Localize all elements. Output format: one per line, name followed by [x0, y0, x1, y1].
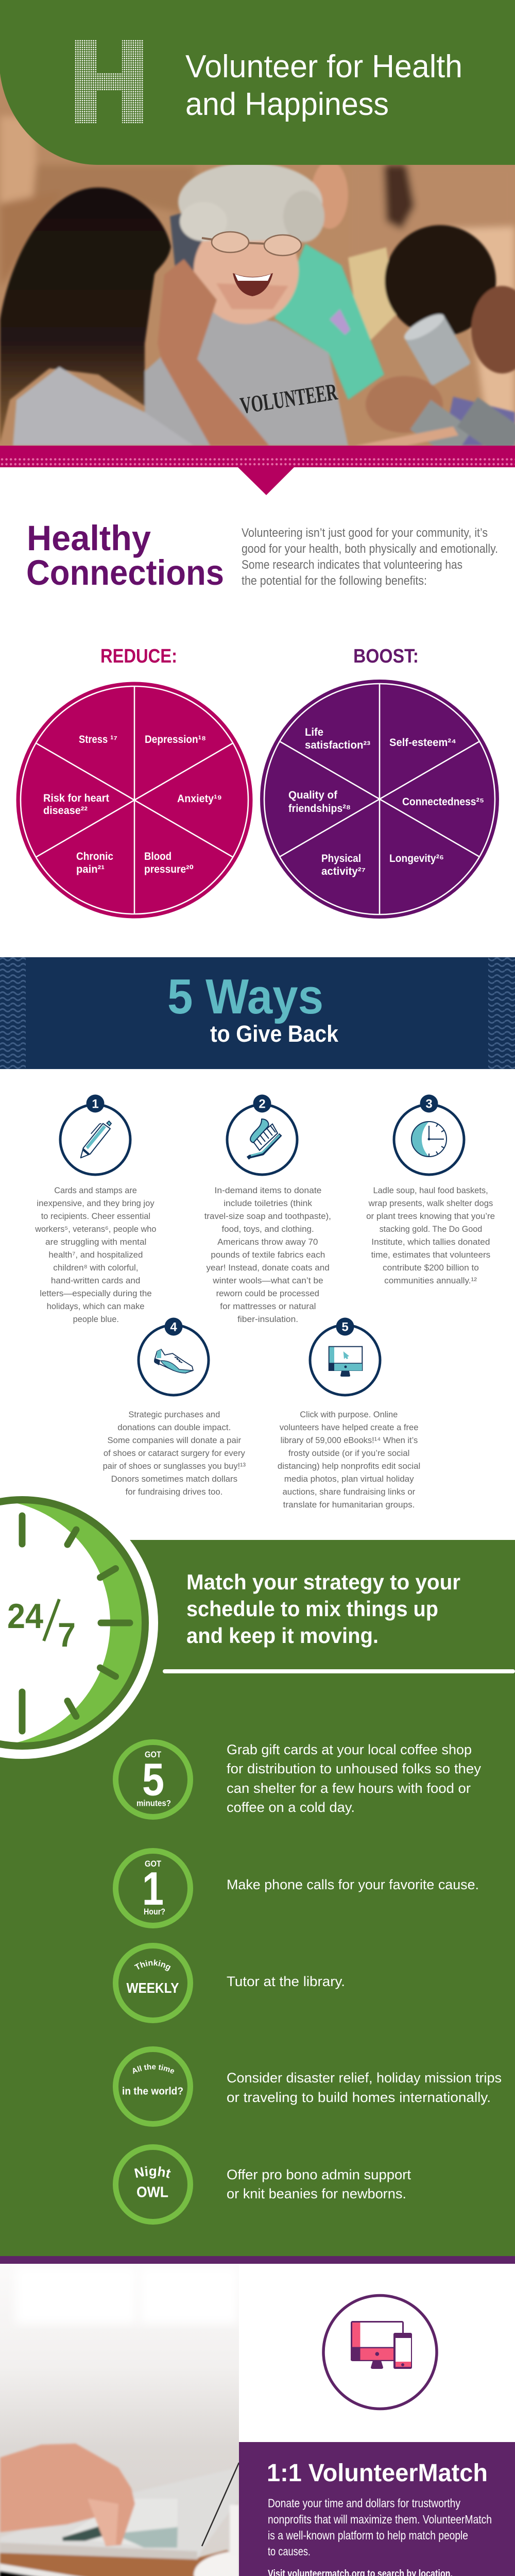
reduce heading: REDUCE: [100, 646, 177, 667]
text: include toiletries (think [224, 1198, 312, 1208]
text: night owl: Offer pro bono admin support [227, 2167, 411, 2182]
chart: reduce wheel: Risk for heart [43, 792, 109, 804]
intro text: the potential for the following benefits: [242, 574, 427, 588]
text: Some companies will donate a pair [107, 1435, 241, 1445]
text: holidays, which can make [47, 1301, 145, 1311]
chart: boost wheel: Connectedness²⁵ [402, 796, 484, 808]
text: night owl: or knit beanies for newborns. [227, 2186, 406, 2201]
title: and Happiness [185, 87, 389, 122]
text: 5 minutes [227, 1742, 481, 1815]
text: hand-written cards and [51, 1276, 140, 1285]
magenta dotted band with arrow [0, 446, 515, 495]
text: distancing) help nonprofits edit social [278, 1461, 420, 1471]
text: volunteers have helped create a free [280, 1422, 418, 1432]
text: 5 minutes: Grab gift cards at your local coffee shop [227, 1742, 472, 1757]
badge: got 5 minutes: 5 [142, 1754, 164, 1805]
text: people blue. [73, 1314, 119, 1324]
chart: reduce wheel: disease²² [43, 805, 88, 817]
text: auctions, share fundraising links or [282, 1487, 416, 1497]
heading [26, 518, 224, 592]
heading: Healthy [27, 518, 151, 558]
chart: boost wheel: Physical [321, 853, 361, 865]
body text [268, 2497, 492, 2558]
text: Ladle soup, haul food baskets, [373, 1185, 488, 1195]
text: fiber-insulation. [237, 1314, 298, 1324]
way 2: donate items [204, 1094, 331, 1324]
text: communities annually.¹² [384, 1276, 477, 1285]
body text: to causes. [268, 2545, 311, 2558]
text: pounds of textile fabrics each [211, 1250, 325, 1260]
text: or plant trees knowing that you’re [366, 1211, 495, 1221]
badge: thinking weekly [113, 1943, 193, 2023]
text [278, 1410, 420, 1510]
text: all the time [227, 2070, 502, 2105]
text: reworn could be processed [216, 1289, 319, 1298]
text: winter wools—what can’t be [212, 1276, 323, 1285]
badge: got 1 hour: GOT [145, 1859, 162, 1869]
text: Institute, which tallies donated [371, 1237, 490, 1247]
badge: got 1 hour [115, 1851, 191, 1926]
heading: 1:1 VolunteerMatch [267, 2460, 488, 2487]
chart: boost wheel: satisfaction²³ [305, 739, 370, 751]
chart: reduce wheel: Depression¹⁸ [145, 734, 206, 745]
badge: got 5 minutes: GOT [145, 1750, 162, 1759]
text: time, estimates that volunteers [371, 1250, 490, 1260]
badge: night owl: OWL [136, 2184, 168, 2201]
text [204, 1185, 331, 1324]
badge: all the time in the world [113, 2046, 193, 2127]
way 4: purchases [103, 1318, 246, 1497]
panel: header photo of laughing volunteers [0, 73, 515, 446]
text: 5 minutes: for distribution to unhoused folks so they [227, 1761, 481, 1776]
text: all the time: Consider disaster relief, holiday mission trips [227, 2070, 502, 2086]
chart: boost wheel: Self-esteem²⁴ [389, 737, 456, 749]
chart: boost wheel: friendships²⁸ [288, 803, 351, 815]
chart: reduce wheel: Chronic [76, 851, 113, 862]
text: translate for humanitarian groups. [283, 1500, 415, 1510]
chart: reduce wheel: Blood [144, 851, 171, 862]
text: Click with purpose. Online [300, 1410, 398, 1419]
chart: reduce wheel: pressure²⁰ [144, 863, 194, 875]
boost heading: BOOST: [353, 646, 419, 667]
icon: 24/7 clock: 24 [7, 1597, 43, 1636]
badge: thinking weekly: Thinking [134, 1959, 171, 1971]
panel: 5 ways banner [0, 957, 515, 1069]
panel: header photo of laughing volunteers: VOLUNTEER [238, 378, 339, 419]
icon: dotted H logo [75, 40, 144, 123]
badge: got 5 minutes: minutes? [136, 1798, 171, 1808]
text: 5 minutes: can shelter for a few hours with food or [227, 1781, 471, 1796]
text: food, toys, and clothing. [221, 1224, 314, 1234]
text: to recipients. Cheer essential [41, 1211, 150, 1221]
text: letters—especially during the [40, 1289, 152, 1298]
icon: toothbrush: 2 [259, 1097, 266, 1111]
icon: monitor [310, 1318, 380, 1395]
text [366, 1185, 495, 1285]
text [103, 1410, 246, 1497]
heading: and keep it moving. [186, 1623, 379, 1648]
icon: sneaker [139, 1318, 209, 1395]
chart: boost wheel: Longevity²⁶ [389, 853, 444, 865]
heading: to give back: to Give Back [210, 1021, 339, 1047]
intro text: Some research indicates that volunteering has [242, 558, 462, 572]
icon: computer and phone [323, 2296, 437, 2409]
text: In-demand items to donate [214, 1185, 321, 1195]
text: workers⁵, veterans⁶, people who [35, 1224, 157, 1234]
title: Volunteer for Health [185, 49, 462, 84]
chart: reduce wheel: pain²¹ [76, 863, 105, 875]
text: media photos, plan virtual holiday [284, 1474, 414, 1484]
text: frosty outside (or if you’re social [288, 1448, 409, 1458]
panel: match your strategy [0, 1496, 515, 2256]
badge: got 5 minutes [115, 1742, 191, 1817]
badge: all the time in the world: All the time [133, 2064, 174, 2074]
text: Donors sometimes match dollars [111, 1474, 237, 1484]
icon: toothbrush [227, 1094, 297, 1175]
badge: night owl: Night [134, 2166, 171, 2178]
text: contribute $200 billion to [383, 1263, 479, 1273]
icon: clock [394, 1094, 464, 1175]
chart: reduce wheel: Anxiety¹⁹ [177, 793, 222, 805]
heading: 5 ways: 5 Ways [167, 969, 323, 1024]
text: all the time: or traveling to build homes internationally. [227, 2090, 491, 2105]
icon: monitor: 5 [341, 1320, 349, 1334]
text: weekly: Tutor at the library. [227, 1974, 345, 1989]
text: of shoes or cataract surgery for every [104, 1448, 245, 1458]
text: pair of shoes or sunglasses you buy!¹³ [103, 1461, 246, 1471]
text: travel-size soap and toothpaste), [204, 1211, 331, 1221]
icon: 24/7 clock [0, 1487, 158, 1759]
icon: sneaker: 4 [170, 1320, 177, 1334]
photo: hands on laptop keyboard [0, 2264, 239, 2576]
text: night owl [227, 2167, 411, 2201]
panel: green header [0, 0, 515, 165]
chart: boost wheel: Quality of [288, 789, 338, 801]
chart: reduce wheel: Stress ¹⁷ [79, 734, 117, 745]
way 5: online [278, 1318, 420, 1510]
panel: volunteermatch [239, 2296, 515, 2576]
intro text [242, 526, 498, 588]
chart: reduce wheel [16, 682, 252, 918]
text: Strategic purchases and [128, 1410, 220, 1419]
text [35, 1185, 157, 1324]
badge: got 1 hour: Hour? [144, 1907, 165, 1917]
way 1: cards [35, 1094, 157, 1324]
heading: Connections [26, 553, 224, 592]
chart: boost wheel: Life [305, 726, 323, 738]
icon: clock: 3 [425, 1097, 433, 1111]
text: stacking gold. The Do Good [380, 1224, 482, 1234]
text: 5 minutes: coffee on a cold day. [227, 1800, 355, 1815]
text: are struggling with mental [45, 1237, 146, 1247]
text: Cards and stamps are [54, 1185, 137, 1195]
text: inexpensive, and they bring joy [37, 1198, 154, 1208]
icon: pen [60, 1094, 130, 1175]
text: library of 59,000 eBooks!¹⁴ When it’s [281, 1435, 418, 1445]
heading [186, 1570, 460, 1648]
heading: Match your strategy to your [186, 1570, 460, 1594]
text: wrap presents, walk shelter dogs [368, 1198, 493, 1208]
badge: all the time in the world: in the world? [122, 2086, 183, 2097]
text: health⁷, and hospitalized [48, 1250, 143, 1260]
text: Americans throw away 70 [217, 1237, 318, 1247]
badge: thinking weekly: WEEKLY [127, 1980, 179, 1996]
chart: boost wheel [260, 680, 499, 919]
text: donations can double impact. [117, 1422, 231, 1432]
text: for fundraising drives too. [126, 1487, 222, 1497]
badge: got 1 hour: 1 [142, 1863, 164, 1915]
heading: schedule to mix things up [186, 1597, 438, 1621]
text: for mattresses or natural [220, 1301, 316, 1311]
body text: is a well-known platform to help match people [268, 2529, 468, 2542]
icon: pen: 1 [92, 1097, 99, 1111]
title [185, 49, 462, 122]
text: year! Instead, donate coats and [206, 1263, 330, 1273]
icon: 24/7 clock: 7 [58, 1616, 76, 1654]
text: children⁸ with colorful, [53, 1263, 138, 1273]
chart: boost wheel: activity²⁷ [321, 866, 366, 877]
body text: Donate your time and dollars for trustworthy [268, 2497, 460, 2510]
way 3: time [366, 1094, 495, 1285]
intro text: Volunteering isn’t just good for your community, it’s [242, 526, 488, 540]
text: 1 hour: Make phone calls for your favorite cause. [227, 1877, 479, 1892]
panel: healthy connections [16, 518, 499, 919]
badge: night owl [113, 2144, 193, 2225]
